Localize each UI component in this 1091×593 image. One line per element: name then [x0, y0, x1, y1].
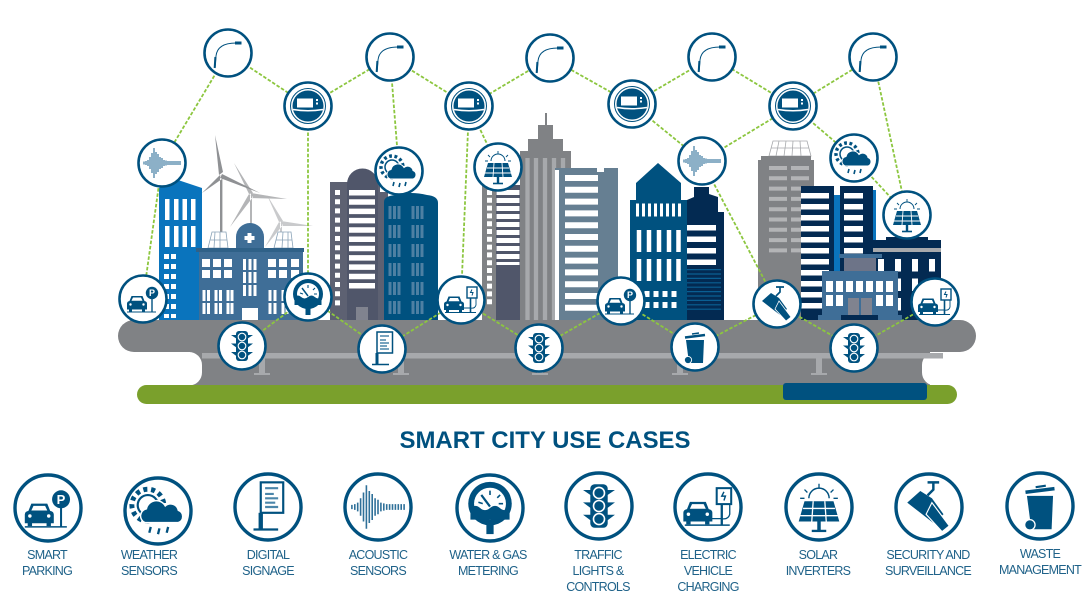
- node: EV charging 2: [912, 278, 958, 326]
- icon: electric vehicle charging: [675, 474, 741, 540]
- building: low blue office: [818, 254, 902, 320]
- node: acoustic sensor 2: [678, 138, 726, 184]
- label: smart parking: SMART: [27, 548, 68, 562]
- network connections: [143, 53, 935, 349]
- node: weather sensor 1: [376, 148, 422, 194]
- icon: acoustic sensors: [345, 474, 411, 540]
- label: weather sensors: SENSORS: [121, 564, 177, 578]
- icon: security camera: [896, 474, 962, 540]
- use case: acoustic sensors: [345, 474, 411, 578]
- use case: weather sensors: [121, 478, 191, 578]
- icon: waste bin: [1007, 473, 1073, 539]
- label: acoustic sensors: SENSORS: [350, 564, 406, 578]
- node: gateway meter 3: [608, 80, 656, 128]
- use case: solar inverters: [786, 474, 852, 578]
- node: smart parking 2: P: [627, 290, 633, 300]
- label: water and gas metering: METERING: [458, 564, 518, 578]
- label: weather sensors: WEATHER: [121, 548, 178, 562]
- node: acoustic sensor 1: [138, 140, 186, 186]
- sensor nodes on city map: [120, 30, 958, 372]
- solar panels: [208, 232, 293, 248]
- node: solar inverter 2: [884, 192, 930, 238]
- road supports: [262, 358, 819, 373]
- node: smart parking 2: [598, 278, 644, 324]
- label: water and gas metering: WATER & GAS: [449, 548, 527, 562]
- road stripe: [202, 353, 943, 358]
- node: traffic light 2: [516, 324, 562, 372]
- building: steel blue slab: [555, 168, 618, 320]
- building: navy twin towers: [801, 186, 876, 320]
- node: street light 4: [688, 34, 736, 80]
- use case: smart parking: [15, 475, 81, 578]
- city illustration: road and ground: [100, 320, 1002, 404]
- node: water and gas meter: [284, 274, 332, 320]
- label: solar inverters: SOLAR: [799, 548, 838, 562]
- ground strip: [137, 385, 957, 404]
- title: SMART CITY USE CASES: [400, 427, 690, 454]
- icon: smart parking: P: [57, 492, 66, 507]
- elevated road deck: [118, 320, 976, 352]
- node: digital signage: [358, 326, 406, 372]
- node: waste bin: [672, 324, 718, 370]
- use case: digital signage: [235, 474, 301, 578]
- node: gateway meter 4: [770, 82, 816, 130]
- icon: traffic lights: [566, 473, 632, 539]
- label: electric vehicle charging: VEHICLE: [684, 564, 733, 578]
- building: grey tower with roof solar panels: [758, 141, 814, 320]
- node: security camera: [754, 280, 800, 328]
- node: smart parking 1: P: [149, 288, 155, 298]
- label: security and surveillance: SURVEILLANCE: [885, 564, 971, 578]
- label: waste management: WASTE: [1020, 547, 1061, 561]
- building: dark navy block: [873, 237, 941, 320]
- use case: electric vehicle charging: [675, 474, 741, 593]
- building: dark navy tower: [687, 187, 724, 320]
- node: solar inverter 1: [474, 144, 522, 190]
- node: gateway meter 1: [284, 82, 332, 130]
- building: slate tower: [330, 168, 388, 320]
- node: smart parking 1: [120, 276, 166, 322]
- label: waste management: MANAGEMENT: [999, 563, 1082, 577]
- label: digital signage: SIGNAGE: [242, 564, 294, 578]
- building: navy tower: [384, 193, 438, 320]
- icon: water and gas metering: [457, 475, 523, 541]
- wind turbines: [202, 135, 313, 250]
- water strip: [783, 383, 927, 400]
- label: traffic lights and controls: TRAFFIC: [574, 548, 622, 562]
- node: street light 3: [526, 34, 574, 82]
- node: weather sensor 2: [830, 134, 878, 182]
- icon: digital signage: [235, 474, 301, 540]
- building: navy pyramid tower: [630, 163, 687, 320]
- node: gateway meter 2: [446, 82, 492, 130]
- label: traffic lights and controls: LIGHTS &: [573, 564, 625, 578]
- label: smart parking: PARKING: [22, 564, 72, 578]
- label: acoustic sensors: ACOUSTIC: [349, 548, 408, 562]
- use case: traffic lights and controls: [566, 473, 632, 593]
- label: electric vehicle charging: ELECTRIC: [680, 548, 737, 562]
- icon: weather sensors: [125, 478, 191, 544]
- node: EV charging 1: [438, 276, 484, 324]
- label: digital signage: DIGITAL: [247, 548, 290, 562]
- use case: security and surveillance: [885, 474, 971, 578]
- node: street light 1: [204, 30, 252, 76]
- building: hospital: [196, 223, 304, 320]
- building: grey slab with dark base: [482, 185, 520, 320]
- icon: solar inverters: [786, 474, 852, 540]
- building: bright blue tower: [159, 180, 202, 320]
- node: street light 5: [850, 34, 896, 80]
- use case: waste management: [999, 473, 1082, 577]
- use case: water and gas metering: [449, 475, 527, 578]
- node: street light 2: [366, 34, 414, 80]
- node: traffic light 3: [830, 324, 878, 372]
- node: traffic light 1: [218, 322, 266, 370]
- building: central skyscraper: [520, 113, 571, 320]
- label: security and surveillance: SECURITY AND: [886, 548, 970, 562]
- label: solar inverters: INVERTERS: [786, 564, 851, 578]
